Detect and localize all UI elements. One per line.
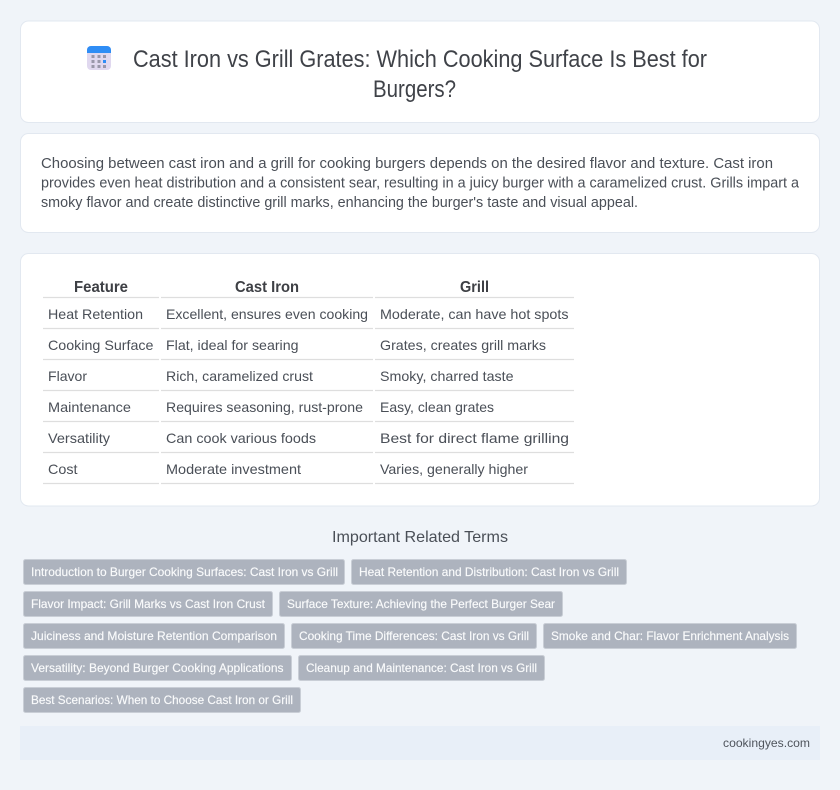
row: versatility: Versatility	[48, 430, 110, 446]
tag: introduction	[24, 560, 344, 584]
tag: flavor impact	[24, 592, 272, 616]
intro paragraph: smoky flavor and create distinctive grill marks, enhancing the burger's taste and visual appeal.	[41, 195, 638, 211]
table rules	[43, 298, 574, 484]
row: heat retention: Heat Retention	[48, 306, 143, 322]
tag: introduction: Introduction to Burger Cooking Surfaces: Cast Iron vs Grill	[31, 565, 338, 579]
tag: surface texture	[280, 592, 562, 616]
row: cooking surface: Flat, ideal for searing	[166, 337, 298, 353]
related term tags	[24, 560, 796, 712]
tag: best scenarios: Best Scenarios: When to Choose Cast Iron or Grill	[31, 693, 293, 707]
row: maintenance	[48, 399, 494, 415]
table header: Grill	[460, 279, 489, 296]
intro paragraph	[41, 156, 800, 211]
tag: surface texture: Surface Texture: Achieving the Perfect Burger Sear	[287, 597, 555, 611]
panel: introduction	[20, 134, 820, 232]
row: cost	[48, 461, 528, 477]
row: heat retention	[48, 306, 568, 322]
tag: cooking time	[292, 624, 536, 648]
tag: juiciness: Juiciness and Moisture Retention Comparison	[31, 629, 277, 643]
footer	[20, 726, 820, 760]
row: cooking surface	[48, 337, 546, 353]
icon: calendar	[87, 46, 111, 70]
title	[133, 46, 707, 103]
tag: heat retention	[352, 560, 626, 584]
tag: juiciness	[24, 624, 284, 648]
panel: header	[20, 21, 820, 122]
row: heat retention: Excellent, ensures even cooking	[166, 306, 368, 322]
row: versatility	[48, 430, 569, 446]
tag: smoke and char	[544, 624, 796, 648]
tag: cooking time: Cooking Time Differences: Cast Iron vs Grill	[299, 629, 529, 643]
tag: best scenarios	[24, 688, 300, 712]
tag: smoke and char: Smoke and Char: Flavor Enrichment Analysis	[551, 629, 789, 643]
footer: cookingyes.com	[723, 736, 810, 750]
panel: comparison table	[20, 254, 820, 506]
tag: versatility	[24, 656, 292, 680]
tag: flavor impact: Flavor Impact: Grill Marks vs Cast Iron Crust	[31, 597, 266, 611]
row: cost: Moderate investment	[166, 461, 301, 477]
intro paragraph: Choosing between cast iron and a grill for cooking burgers depends on the desired flavor and texture. Cast iron	[41, 156, 773, 172]
row: cooking surface: Grates, creates grill marks	[380, 337, 546, 353]
row: cooking surface: Cooking Surface	[48, 337, 154, 353]
heading: related terms: Important Related Terms	[332, 529, 508, 546]
row: versatility: Can cook various foods	[166, 430, 316, 446]
table header	[74, 279, 489, 296]
tag: heat retention: Heat Retention and Distribution: Cast Iron vs Grill	[359, 565, 619, 579]
row: flavor: Flavor	[48, 368, 87, 384]
tag: cleanup: Cleanup and Maintenance: Cast Iron vs Grill	[306, 661, 537, 675]
row: heat retention: Moderate, can have hot spots	[380, 306, 568, 322]
intro paragraph: provides even heat distribution and a consistent sear, resulting in a juicy burger with a caramelized crust. Grills impart a	[41, 176, 800, 192]
row: flavor: Smoky, charred taste	[380, 368, 514, 384]
row: versatility: Best for direct flame grilling	[380, 430, 569, 446]
row: maintenance: Easy, clean grates	[380, 399, 494, 415]
tag: cleanup	[298, 656, 544, 680]
row: cost: Cost	[48, 461, 78, 477]
title: Burgers?	[373, 76, 456, 103]
row: maintenance: Requires seasoning, rust-prone	[166, 399, 363, 415]
row: flavor	[48, 368, 514, 384]
table header: Cast Iron	[235, 279, 299, 296]
row: flavor: Rich, caramelized crust	[166, 368, 313, 384]
title: Cast Iron vs Grill Grates: Which Cooking Surface Is Best for	[133, 46, 707, 73]
table header: Feature	[74, 279, 128, 296]
tag: versatility: Versatility: Beyond Burger Cooking Applications	[31, 661, 284, 675]
row: maintenance: Maintenance	[48, 399, 131, 415]
row: cost: Varies, generally higher	[380, 461, 528, 477]
